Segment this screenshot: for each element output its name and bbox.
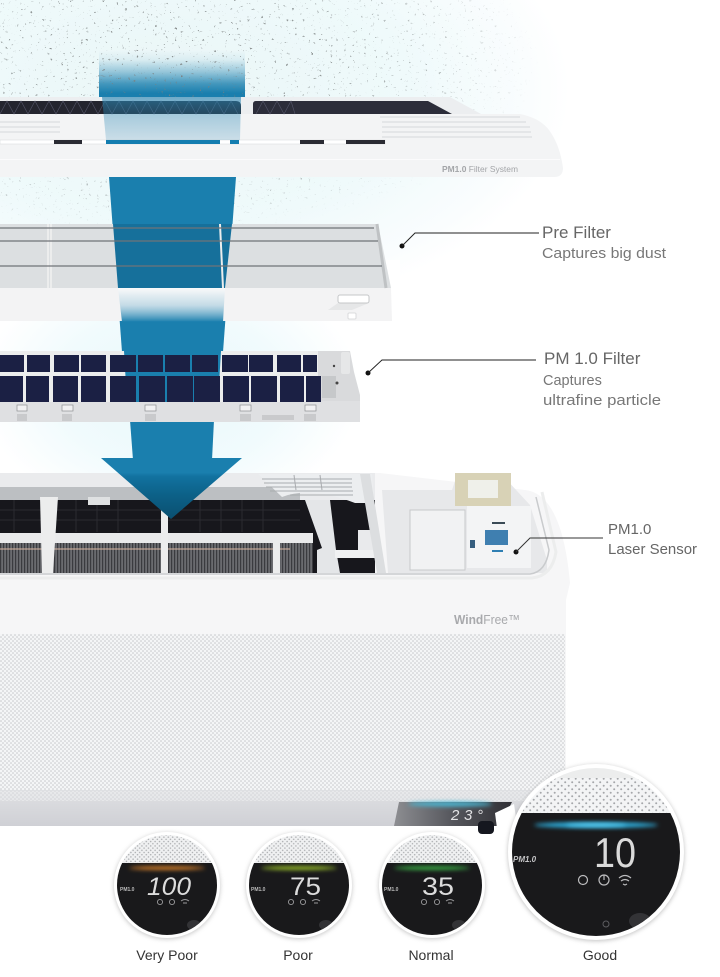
callout: PM1.0 Laser Sensor (514, 521, 697, 558)
airflow beam: upper fade (99, 50, 245, 98)
circle labels: Normal (408, 947, 454, 963)
beam through panel (102, 97, 241, 140)
filter right end details (322, 352, 350, 398)
circle: Poor: PM1.0 (251, 887, 266, 893)
dark filter bay (0, 500, 375, 533)
circle: Poor (246, 832, 352, 939)
circle: Normal: PM1.0 (384, 887, 399, 893)
callout: PM 1.0 Filter: PM 1.0 Filter (544, 349, 641, 368)
arrow head (101, 458, 242, 519)
callout: PM1.0 Laser Sensor: Laser Sensor (608, 541, 697, 558)
pre filter latch (328, 303, 369, 310)
unit rim (0, 497, 549, 574)
unit interior top strip (0, 473, 375, 500)
sensor blue window (485, 530, 508, 545)
circle labels: Good (583, 947, 617, 963)
callout: PM1.0 Laser Sensor: PM1.0 (608, 521, 651, 538)
background glow (0, 0, 720, 520)
callout: Pre Filter: Captures big dust (542, 246, 666, 262)
airflow beam: middle sections (109, 177, 236, 460)
callout: Pre Filter: Pre Filter (542, 223, 611, 242)
heat exchanger coil (0, 543, 313, 573)
circle labels (136, 947, 617, 963)
callout: PM 1.0 Filter: Captures (543, 373, 602, 389)
crossbar strip (0, 533, 318, 543)
beige module (455, 473, 511, 506)
circle: Good (500, 764, 692, 943)
folded grille (258, 474, 374, 503)
white sensor cover (467, 506, 531, 568)
front panel: PM1.0 Filter System (0, 97, 563, 177)
callout: PM 1.0 Filter (366, 349, 661, 409)
magnifier pointer knob (478, 804, 520, 845)
beam through filter frame (124, 351, 221, 402)
temperature display (394, 802, 512, 826)
dark filter cells (0, 355, 321, 402)
pre filter mesh frame (48, 224, 386, 288)
panel lower slot (0, 140, 385, 144)
circle: Good: PM1.0 (513, 855, 537, 864)
callout: PM 1.0 Filter: ultrafine particle (543, 393, 661, 409)
circle labels: Very Poor (136, 947, 198, 963)
control box (410, 510, 465, 570)
circle: Good: 10 (594, 829, 636, 876)
WindFree logo: WindFree™ (454, 612, 520, 627)
circle: Normal: 35 (422, 873, 454, 901)
air conditioner unit body (0, 473, 570, 826)
vent louvers (0, 117, 532, 137)
filter clips (17, 405, 316, 411)
lower body (0, 790, 566, 826)
frame post (360, 474, 386, 573)
pre filter beam overlap (113, 224, 232, 288)
circle: Very Poor: PM1.0 (120, 887, 135, 893)
pre filter (0, 224, 392, 322)
temperature display: 23° (450, 807, 483, 824)
sensor module housing (382, 473, 547, 573)
circle labels: Poor (283, 947, 313, 963)
right bay with hinge and white parts (305, 500, 375, 573)
circle: Very Poor: 100 (147, 873, 191, 901)
vertical supports (40, 497, 280, 573)
circle: Very Poor (114, 832, 220, 939)
callout: Pre Filter (400, 223, 666, 262)
dust particles (0, 0, 526, 224)
dark air intake slots (0, 101, 452, 114)
PM1.0 filter (0, 351, 360, 422)
status icons (578, 875, 631, 885)
perforated front grille (0, 634, 565, 790)
panel label: PM1.0 Filter System (442, 164, 518, 174)
circle: Normal (379, 832, 485, 939)
circle: Poor: 75 (290, 873, 321, 901)
